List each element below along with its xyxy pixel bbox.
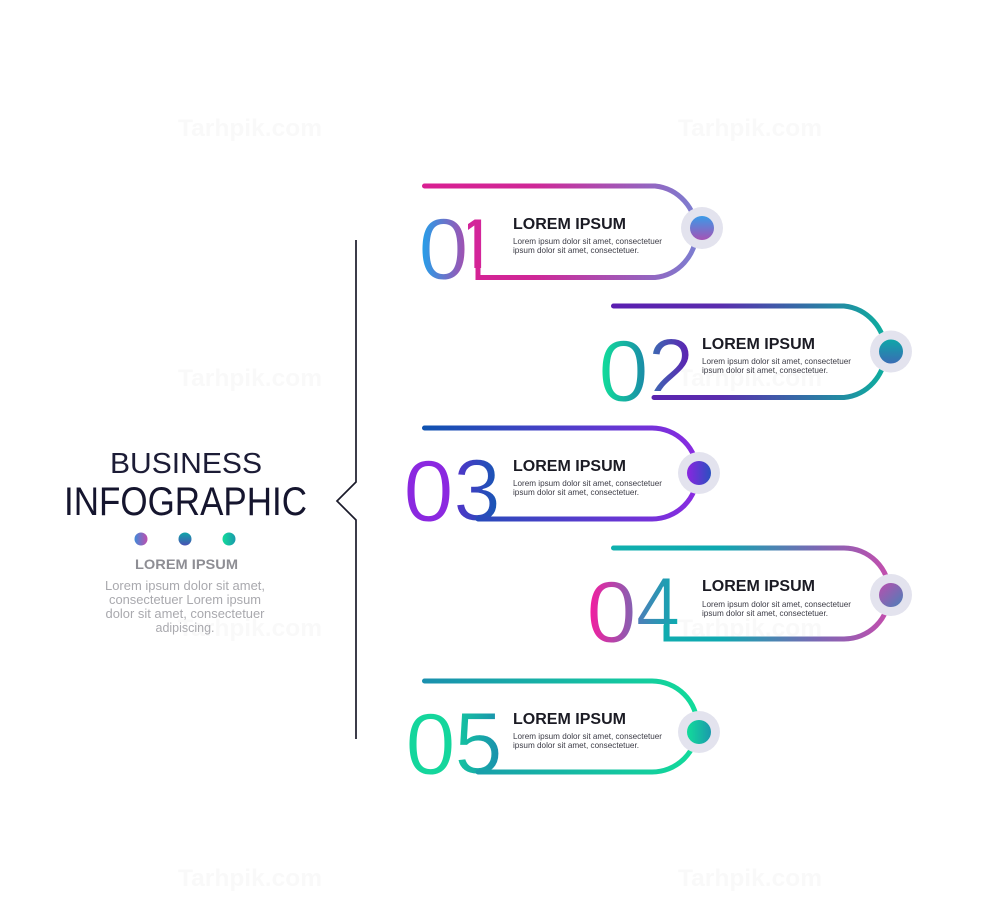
watermarks: Tarhpik.com (178, 615, 322, 642)
body text: Lorem ipsum dolor sit amet, consectetuer (513, 236, 662, 246)
body text (702, 356, 851, 375)
watermarks: Tarhpik.com (178, 865, 322, 892)
body text: ipsum dolor sit amet, consectetuer. (702, 365, 828, 375)
bracket divider with chevron (337, 240, 356, 739)
number 03: 3 (454, 442, 500, 539)
number 03 (404, 442, 500, 540)
description: consectetuer Lorem ipsum (109, 593, 261, 607)
body text (513, 478, 662, 497)
watermarks: Tarhpik.com (178, 115, 322, 142)
frame (614, 548, 890, 639)
three gradient dots (134, 532, 236, 546)
description: dolor sit amet, consectetuer (106, 607, 264, 621)
panel: step 05 (406, 681, 720, 793)
watermarks: Tarhpik.com (678, 615, 822, 642)
panel: step 03 (404, 428, 720, 540)
heading: LOREM IPSUM (513, 216, 626, 233)
panel: step 02 (602, 304, 912, 402)
number 01: 0 (418, 201, 468, 298)
frame (424, 186, 696, 278)
description: Lorem ipsum dolor sit amet, (105, 579, 265, 593)
number 01: 1 (452, 201, 500, 298)
subheading: LOREM IPSUM (135, 556, 238, 572)
number 02: 0 (598, 323, 648, 420)
icon: node (870, 330, 912, 372)
number 05: 5 (454, 695, 502, 792)
body text: ipsum dolor sit amet, consectetuer. (513, 487, 639, 497)
heading: LOREM IPSUM (702, 578, 815, 595)
title block (64, 448, 307, 635)
watermarks: Tarhpik.com (678, 865, 822, 892)
number 05: 0 (406, 696, 456, 793)
frame (424, 681, 698, 772)
icon: node (870, 574, 912, 616)
watermarks: Tarhpik.com (178, 365, 322, 392)
panel: step 01 (422, 184, 723, 280)
body text: Lorem ipsum dolor sit amet, consectetuer (702, 356, 851, 366)
body text: ipsum dolor sit amet, consectetuer. (702, 608, 828, 618)
body text: ipsum dolor sit amet, consectetuer. (513, 740, 639, 750)
body text: ipsum dolor sit amet, consectetuer. (513, 245, 639, 255)
description (105, 579, 265, 635)
icon: node (678, 711, 720, 753)
number 03: 0 (404, 443, 454, 540)
number 02 (602, 339, 688, 402)
body text (513, 236, 662, 255)
heading: LOREM IPSUM (513, 711, 626, 728)
title: business: BUSINESS (110, 448, 262, 480)
icon: node (681, 207, 723, 249)
number 04: 0 (586, 564, 636, 661)
body text: Lorem ipsum dolor sit amet, consectetuer (702, 599, 851, 609)
number 02: 2 (648, 322, 694, 418)
icon: node (678, 452, 720, 494)
panel: step 04 (586, 548, 912, 661)
number 04 (586, 560, 680, 661)
heading: LOREM IPSUM (513, 458, 626, 475)
body text: Lorem ipsum dolor sit amet, consectetuer (513, 478, 662, 488)
number 05 (406, 695, 502, 793)
number 01 (422, 218, 482, 280)
body text (702, 599, 851, 618)
title: infographic: INFOGRAPHIC (64, 480, 307, 524)
watermarks: Tarhpik.com (678, 115, 822, 142)
heading: LOREM IPSUM (702, 336, 815, 353)
watermarks (178, 115, 822, 892)
watermarks: Tarhpik.com (678, 365, 822, 392)
frame (424, 428, 698, 519)
frame (614, 306, 885, 398)
description: adipiscing. (156, 621, 214, 635)
body text: Lorem ipsum dolor sit amet, consectetuer (513, 731, 662, 741)
body text (513, 731, 662, 750)
number 04: 4 (636, 560, 680, 657)
